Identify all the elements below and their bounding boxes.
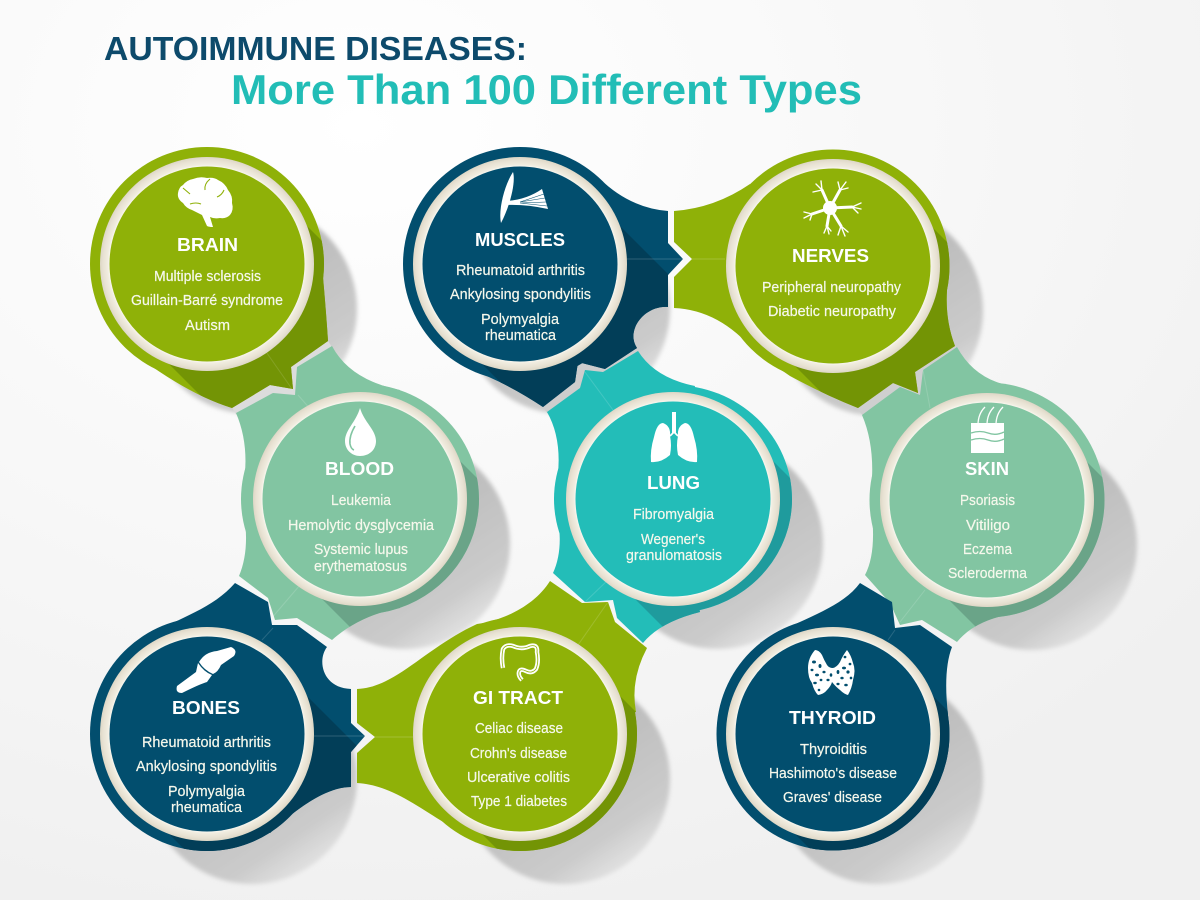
gi tract list: Crohn's disease (470, 745, 567, 762)
panel: skin (862, 347, 1104, 642)
panel: nerves (674, 150, 955, 408)
thyroid ring (726, 627, 940, 841)
gi tract list: Type 1 diabetes (471, 793, 567, 810)
muscles list: Ankylosing spondylitis (450, 286, 591, 303)
nerves ring (726, 159, 940, 373)
heading line 2: More Than 100 Different Types (231, 66, 862, 113)
lung label: LUNG (647, 473, 700, 493)
panel: thyroid (716, 583, 952, 850)
lung list: Fibromyalgia (633, 506, 715, 523)
blood list: Leukemia (331, 492, 392, 509)
blood ring (253, 392, 467, 606)
thyroid label: THYROID (789, 708, 876, 728)
gi tract ring (413, 627, 627, 841)
brain list: Multiple sclerosis (154, 268, 261, 285)
skin label: SKIN (965, 459, 1009, 479)
nerves blob (674, 150, 955, 408)
icon: thyroid gland (808, 650, 854, 695)
title (104, 30, 862, 113)
thyroid list: Hashimoto's disease (769, 765, 897, 782)
muscles ring (413, 157, 627, 371)
gi tract list: Ulcerative colitis (467, 769, 570, 786)
brain list (131, 268, 283, 334)
icon: skin layers (971, 407, 1004, 453)
skin list: Psoriasis (960, 492, 1015, 509)
bones label: BONES (172, 698, 240, 718)
muscles list: rheumatica (485, 327, 557, 344)
thyroid list (769, 741, 897, 806)
skin list: Eczema (963, 541, 1013, 558)
panel: lung (547, 351, 792, 643)
muscles list (450, 262, 591, 344)
lung list: Wegener's (641, 531, 705, 548)
skin list (948, 492, 1028, 582)
bones list: Polymyalgia (168, 783, 246, 800)
thyroid blob (716, 583, 952, 850)
blood list (288, 492, 435, 575)
brain ring (100, 157, 314, 371)
blood list: erythematosus (314, 558, 407, 575)
nerves list: Peripheral neuropathy (762, 279, 901, 296)
icon: blood drop (345, 408, 376, 456)
panel: gi tract (357, 581, 647, 851)
brain blob (90, 147, 328, 408)
panel: brain (90, 147, 328, 408)
icon: brain (178, 177, 233, 227)
thyroid list: Graves' disease (783, 789, 882, 806)
lung list (626, 506, 722, 564)
skin ring (880, 393, 1094, 607)
bones ring (100, 627, 314, 841)
muscles blob (403, 147, 683, 407)
bones list: Rheumatoid arthritis (142, 734, 271, 751)
bones list: Ankylosing spondylitis (136, 758, 277, 775)
skin list: Vitiligo (966, 517, 1010, 534)
brain label: BRAIN (177, 235, 238, 255)
heading line 1: AUTOIMMUNE DISEASES: (104, 30, 527, 67)
nerves label: NERVES (792, 246, 869, 266)
blood label: BLOOD (325, 459, 394, 479)
thyroid list: Thyroiditis (800, 741, 867, 758)
panel: bones (90, 583, 365, 851)
bones blob (90, 583, 365, 851)
skin blob (862, 347, 1104, 642)
icon: joint (177, 647, 235, 693)
panel: muscles (403, 147, 683, 407)
brain list: Autism (185, 317, 230, 334)
icon: intestine (502, 645, 538, 680)
icon: muscle (500, 172, 548, 223)
skin list: Scleroderma (948, 565, 1028, 582)
brain list: Guillain-Barré syndrome (131, 292, 283, 309)
muscles list: Polymyalgia (481, 311, 560, 328)
panel: blood (236, 346, 479, 640)
icon: neuron (804, 181, 861, 236)
bones list: rheumatica (171, 799, 243, 816)
gi tract label: GI TRACT (473, 688, 563, 708)
gi tract list (467, 720, 570, 810)
cast shadows (147, 204, 1137, 884)
nerves list: Diabetic neuropathy (768, 303, 896, 320)
bones list (136, 734, 277, 816)
blood list: Systemic lupus (314, 541, 408, 558)
muscles list: Rheumatoid arthritis (456, 262, 585, 279)
blood blob (236, 346, 479, 640)
gi tract blob (357, 581, 647, 851)
muscles label: MUSCLES (475, 230, 565, 250)
gaps between interlocking connectors (234, 344, 956, 412)
gi tract list: Celiac disease (475, 720, 563, 737)
blood list: Hemolytic dysglycemia (288, 517, 435, 534)
icon: lungs (651, 412, 697, 462)
lung list: granulomatosis (626, 547, 722, 564)
nerves list (762, 279, 901, 320)
lung ring (566, 392, 780, 606)
lung blob (547, 351, 792, 643)
